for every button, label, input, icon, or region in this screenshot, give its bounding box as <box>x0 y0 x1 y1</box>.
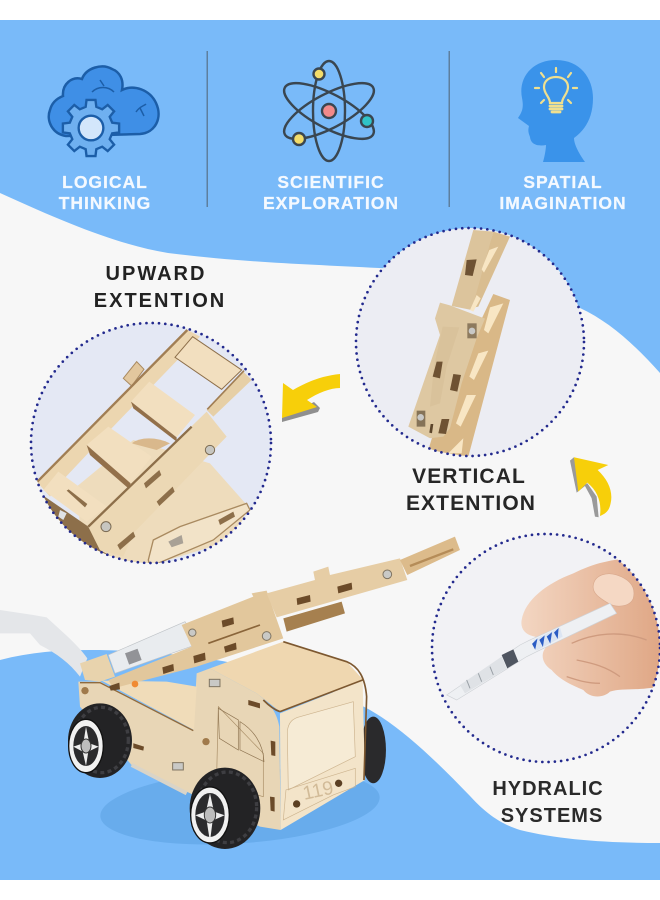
heading: upward extention <box>94 263 226 312</box>
truck shadow <box>100 769 380 844</box>
heading: upward extention: EXTENTION <box>94 290 226 312</box>
heading: logical thinking <box>59 172 151 213</box>
cab window <box>217 707 263 797</box>
icon: brain cloud with gear <box>49 66 159 156</box>
syringe <box>108 622 200 673</box>
ladder lower section <box>283 602 345 632</box>
heading: hydralic systems: HYDRALIC <box>492 778 604 800</box>
heading: logical thinking: THINKING <box>59 193 151 213</box>
heading: scientific exploration: SCIENTIFIC <box>277 172 385 192</box>
heading: spatial imagination: SPATIAL <box>523 172 603 192</box>
heading: vertical extention: EXTENTION <box>406 492 536 515</box>
photo: wooden fire truck <box>0 537 460 853</box>
heading: spatial imagination <box>499 172 627 213</box>
panel: hydraulic systems photo <box>432 534 660 762</box>
heading: scientific exploration <box>263 172 399 213</box>
ladder slots <box>109 583 352 812</box>
photo: wooden fire truck: 119 <box>301 778 335 805</box>
heading: vertical extention: VERTICAL <box>412 465 526 488</box>
heading: hydralic systems <box>492 778 604 827</box>
truck bed <box>102 681 197 730</box>
chassis rod <box>132 765 187 793</box>
heading: vertical extention <box>406 465 536 515</box>
panel: vertical extension photo <box>356 228 584 457</box>
divider right <box>448 51 450 207</box>
small body holes <box>81 687 89 694</box>
heading: upward extention: UPWARD <box>106 263 206 285</box>
panel: upward extension photo <box>31 323 271 567</box>
rear panel <box>80 654 115 682</box>
heading: scientific exploration: EXPLORATION <box>263 193 399 213</box>
ladder bolts <box>173 570 392 770</box>
icon: head with light bulb <box>518 60 593 162</box>
arrow: yellow pointing up <box>570 457 611 517</box>
heading: spatial imagination: IMAGINATION <box>499 193 627 213</box>
arrow: yellow pointing left <box>282 374 340 422</box>
back wheel right <box>364 716 386 784</box>
front face <box>280 681 365 830</box>
heading: logical thinking: LOGICAL <box>62 172 148 192</box>
front wheel <box>190 768 260 849</box>
heading: hydralic systems: SYSTEMS <box>501 805 603 827</box>
ladder upper section <box>267 558 407 617</box>
hose <box>0 610 87 677</box>
icon: atom <box>277 61 381 161</box>
cab roof <box>210 642 363 712</box>
divider left <box>206 51 208 207</box>
side body <box>78 668 281 830</box>
rear wheel <box>68 703 132 778</box>
